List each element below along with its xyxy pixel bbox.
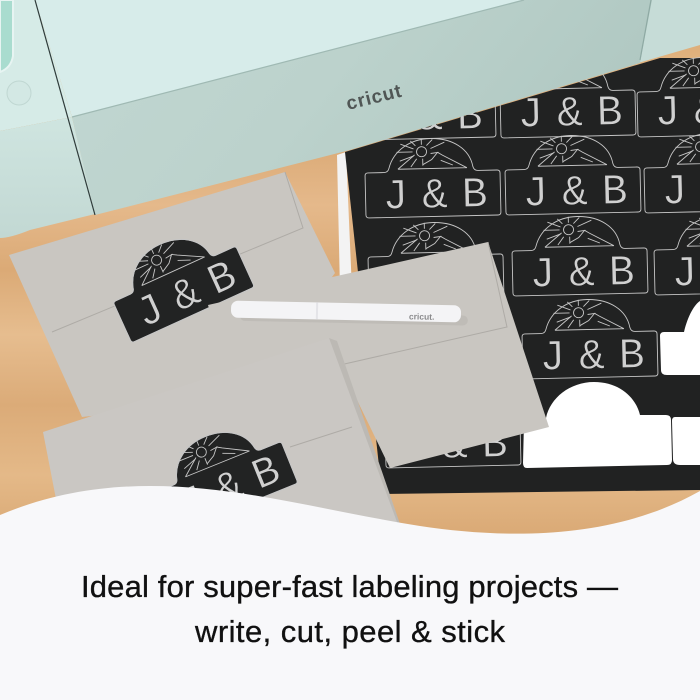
label row 2 column 2 xyxy=(511,215,648,300)
wood table background xyxy=(0,0,700,540)
lid crease xyxy=(72,0,524,117)
envelope back left xyxy=(9,172,335,417)
envelope body xyxy=(208,242,549,468)
label row 2 column 3 xyxy=(653,214,700,299)
white sheet edge xyxy=(337,152,352,290)
machine left side xyxy=(0,117,95,238)
label row 0 column 3 xyxy=(636,56,700,138)
pen body xyxy=(231,301,461,322)
label row 4 column 1: J & B xyxy=(402,420,507,472)
caption xyxy=(81,569,618,649)
label row 1 column 1: J & B xyxy=(382,170,487,222)
envelope crease xyxy=(290,427,352,447)
label row 1 column 1 xyxy=(364,137,501,222)
envelope flap crease xyxy=(52,172,303,332)
pen xyxy=(231,301,468,326)
machine top lid xyxy=(35,0,524,117)
envelope back layer edge xyxy=(50,338,400,540)
label row 1 column 2: J & B xyxy=(522,167,627,219)
pen cap divider xyxy=(316,302,318,319)
envelope body xyxy=(9,172,335,417)
label row 0 column 1: J & B xyxy=(377,92,482,144)
machine right end xyxy=(638,0,700,63)
label row 3 column 2: J & B xyxy=(539,331,644,383)
envelope crease xyxy=(340,242,507,365)
power button xyxy=(7,81,31,105)
machine front panel xyxy=(72,0,652,215)
right seam xyxy=(640,0,651,60)
sticker on back envelope: J & B xyxy=(128,252,244,340)
sticker on front envelope: J & B xyxy=(172,447,287,531)
control panel xyxy=(0,0,13,72)
label row 0 column 2: J & B xyxy=(517,88,622,140)
envelope front xyxy=(43,338,400,540)
label row 3 column 2 xyxy=(521,298,658,383)
sticker on front envelope xyxy=(144,411,300,537)
label row 0 column 1 xyxy=(359,59,496,144)
pen shadow xyxy=(240,311,468,326)
label row 2 column 1 xyxy=(367,221,504,306)
pen brand: cricut. xyxy=(409,311,435,322)
black label sheet xyxy=(337,56,700,494)
sticker on back envelope xyxy=(99,216,256,347)
label row 1 column 2 xyxy=(504,134,641,219)
machine brand: cricut xyxy=(344,81,404,115)
label row 0 column 2 xyxy=(499,57,636,140)
label row 1 column 3 xyxy=(643,132,700,217)
label row 2 column 2: J & B xyxy=(529,248,634,300)
label row 2 column 1: J & B xyxy=(385,254,490,306)
envelope body xyxy=(43,338,397,540)
machine left top xyxy=(0,0,72,131)
peeled white label right top xyxy=(660,301,700,375)
black backing xyxy=(345,58,700,494)
caption line 1: Ideal for super-fast labeling projects — xyxy=(81,569,618,604)
cutting machine xyxy=(0,0,700,238)
envelope middle xyxy=(208,242,549,468)
peeled white label large xyxy=(523,382,672,468)
machine seam xyxy=(35,0,95,215)
label row 4 column 1 xyxy=(384,387,521,472)
caption line 2: write, cut, peel & stick xyxy=(194,614,506,649)
white wave panel xyxy=(0,486,700,700)
peeled white label right bottom xyxy=(672,417,700,465)
